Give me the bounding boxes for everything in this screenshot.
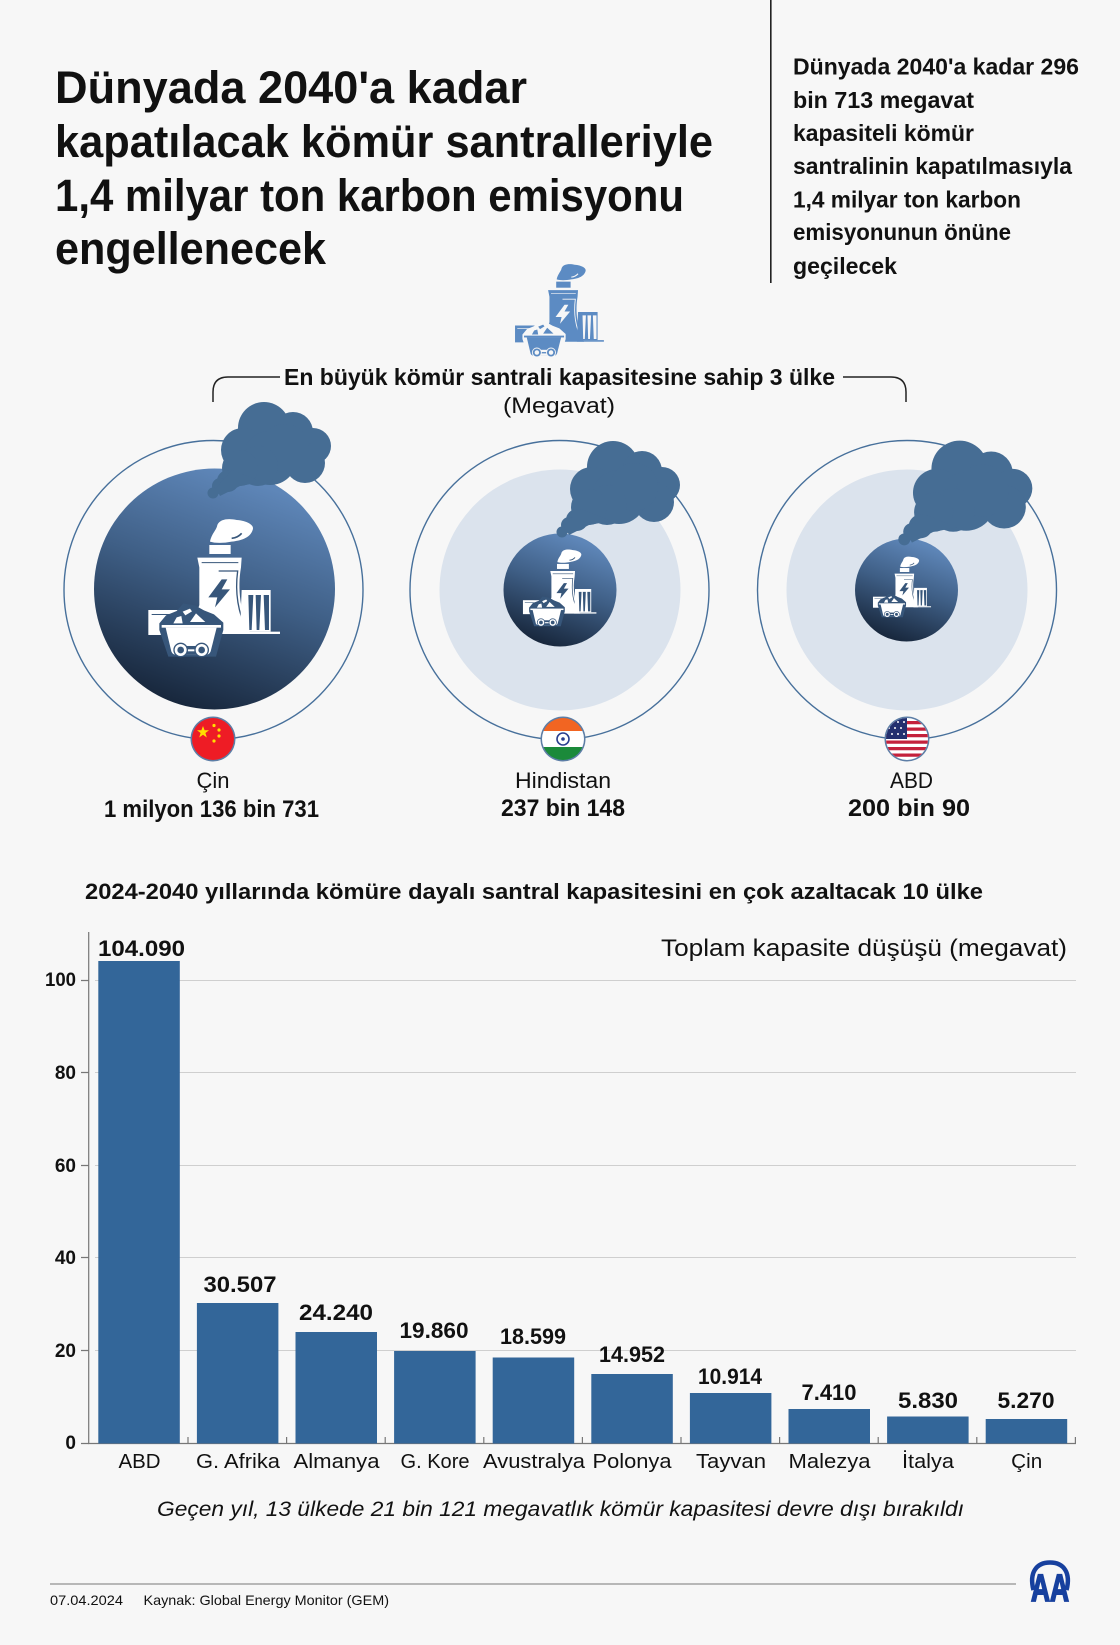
country labels: G. Afrika	[196, 1451, 281, 1473]
bar values	[98, 936, 1054, 1413]
summary text: Dünyada 2040'a kadar 296	[793, 54, 1079, 80]
title: Dünyada 2040'a kadar	[55, 62, 527, 113]
flag: India	[540, 716, 586, 762]
icon: smoke China	[208, 402, 331, 498]
bar values: 19.860	[400, 1318, 468, 1343]
panel: USA	[758, 440, 1056, 822]
icon: plant USA	[873, 557, 931, 618]
icon: smoke India	[556, 441, 680, 538]
footer date: 07.04.2024	[50, 1592, 123, 1608]
label: India: Hindistan	[515, 768, 611, 793]
label: China: Çin	[196, 768, 230, 793]
bar values: 104.090	[98, 936, 185, 961]
icon: coal plant	[515, 264, 604, 357]
y axis labels: 40	[55, 1248, 76, 1269]
country labels: Avustralya	[483, 1451, 586, 1473]
label: China: 1 milyon 136 bin 731	[104, 796, 319, 823]
section heading: top 3 countries: (Megavat)	[503, 393, 615, 418]
bar chart	[45, 932, 1076, 1473]
country labels: Malezya	[788, 1451, 871, 1473]
label: USA: 200 bin 90	[848, 795, 970, 822]
y axis labels: 80	[55, 1063, 76, 1084]
capacity disc: India	[504, 534, 616, 646]
icon: plant China	[148, 519, 280, 657]
bar values: 10.914	[698, 1364, 763, 1389]
title: kapatılacak kömür santralleriyle	[55, 116, 713, 167]
chart heading: 2024-2040 yıllarında kömüre dayalı santral kapasitesini en çok azaltacak 10 ülke	[85, 879, 983, 904]
vertical divider	[770, 0, 772, 283]
flag: China	[190, 716, 236, 762]
label: China	[104, 768, 319, 823]
icon: smoke USA	[898, 441, 1032, 545]
flag: USA	[884, 716, 930, 762]
chart note: Geçen yıl, 13 ülkede 21 bin 121 megavatlık kömür kapasitesi devre dışı bırakıldı	[157, 1498, 964, 1521]
country labels: G. Kore	[400, 1451, 470, 1473]
footer rule	[50, 1584, 1016, 1585]
footer source: Kaynak: Global Energy Monitor (GEM)	[144, 1592, 389, 1608]
reference disc: India	[440, 470, 680, 710]
bars	[98, 961, 1067, 1444]
bar values: 24.240	[299, 1300, 373, 1325]
country labels: Almanya	[294, 1451, 380, 1473]
summary text	[793, 54, 1079, 279]
label: USA	[848, 768, 970, 822]
y axis labels	[45, 970, 76, 1454]
chart unit label: Toplam kapasite düşüşü (megavat)	[661, 935, 1067, 962]
bar values: 7.410	[802, 1380, 856, 1405]
country labels: İtalya	[902, 1450, 955, 1473]
y axis labels: 100	[45, 970, 76, 991]
logo: AA: AA	[1031, 1568, 1069, 1610]
logo: AA	[1031, 1562, 1069, 1610]
label: USA: ABD	[890, 768, 933, 793]
capacity disc: USA	[855, 538, 958, 642]
reference disc: USA	[786, 470, 1028, 710]
summary text: emisyonunun önüne	[793, 219, 1011, 245]
label: India: 237 bin 148	[501, 795, 625, 822]
summary text: kapasiteli kömür	[793, 120, 974, 146]
summary text: bin 713 megavat	[793, 87, 974, 113]
y axis labels: 60	[55, 1156, 76, 1177]
capacity disc: China	[94, 468, 335, 710]
summary text: 1,4 milyar ton karbon	[793, 186, 1021, 212]
y axis labels: 0	[65, 1433, 76, 1454]
country labels	[118, 1450, 1042, 1473]
y axis labels: 20	[55, 1341, 76, 1362]
bar values: 14.952	[599, 1342, 665, 1367]
bar values: 5.270	[998, 1388, 1054, 1413]
panel: China	[64, 402, 363, 823]
panel: India	[410, 440, 709, 822]
section heading: top 3 countries: En büyük kömür santrali kapasitesine sahip 3 ülke	[284, 364, 835, 390]
icon: plant India	[523, 549, 596, 627]
country labels: ABD	[118, 1451, 160, 1473]
label: India	[501, 768, 625, 822]
title	[55, 62, 713, 274]
country labels: Çin	[1011, 1451, 1042, 1473]
summary text: geçilecek	[793, 253, 897, 279]
summary text: santralinin kapatılmasıyla	[793, 153, 1072, 179]
bar values: 30.507	[204, 1272, 276, 1297]
title: engellenecek	[55, 223, 327, 274]
country labels: Tayvan	[696, 1451, 766, 1473]
bar values: 5.830	[898, 1388, 958, 1413]
country labels: Polonya	[592, 1451, 672, 1473]
bar values: 18.599	[500, 1324, 566, 1349]
section heading: top 3 countries	[213, 364, 906, 418]
title: 1,4 milyar ton karbon emisyonu	[55, 170, 684, 221]
